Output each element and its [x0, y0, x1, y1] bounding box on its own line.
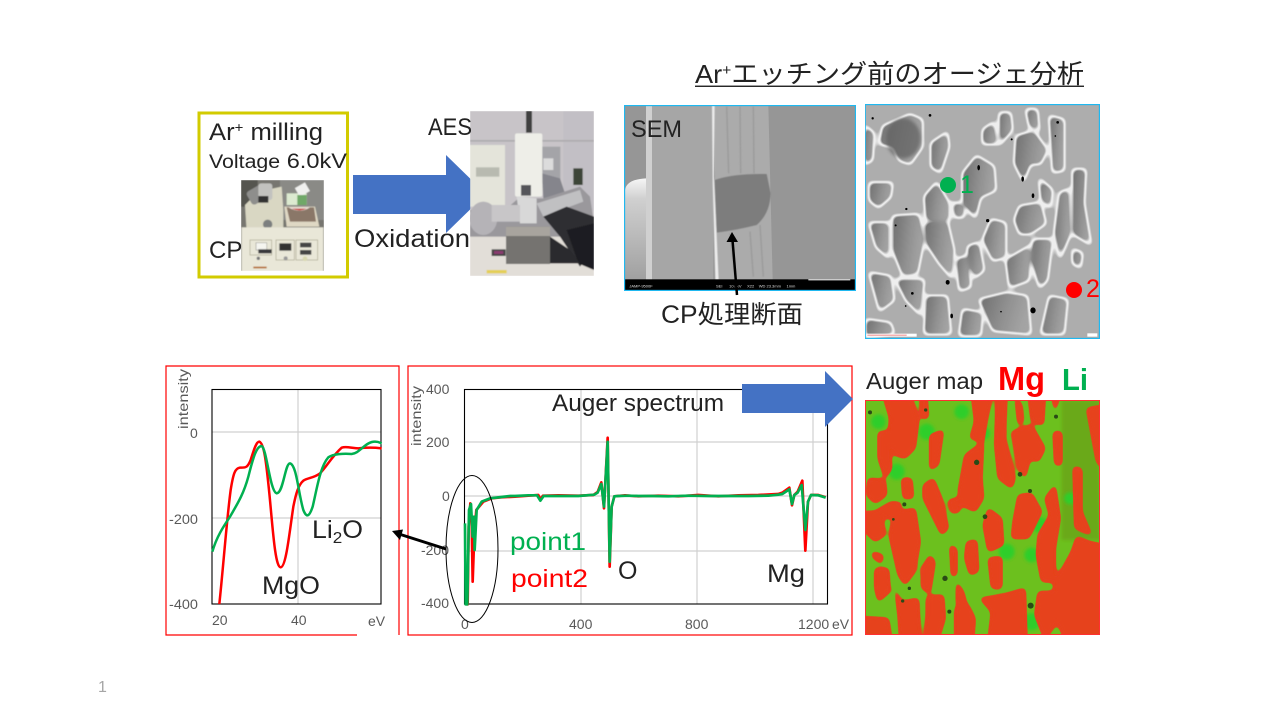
photo: Auger electron spectrometer [470, 111, 594, 276]
arrow: to CP cross-section [726, 232, 738, 295]
text: SEM settings: SEI 10.0kV X22 WD 23.3mm 1mm [716, 283, 796, 288]
y axis ticks: 0 [190, 425, 198, 441]
text: voltage: Voltage 6.0kV [209, 150, 347, 173]
arrow: oxidation transfer [353, 155, 486, 233]
chart: Auger element map [865, 400, 1100, 635]
text: CP cross-section label: CP処理断面 [661, 301, 803, 329]
grid lines and plot frame [464, 389, 828, 604]
x axis ticks: 20 [212, 612, 228, 628]
panel: CP Ar+ milling [199, 113, 348, 277]
annotation: Li2O: O [342, 516, 363, 544]
callout: low-energy ellipse [446, 476, 498, 622]
y axis ticks: -200 [169, 511, 198, 527]
photo: SEM micrograph with analysis points [865, 104, 1100, 339]
heading: Auger map: Auger map [866, 368, 983, 394]
text: Oxidation: Oxidation [354, 225, 470, 253]
photo: SEM overview [624, 105, 856, 291]
heading: Auger spectrum: Auger spectrum [552, 390, 724, 417]
y axis ticks: -400 [169, 596, 198, 612]
annotation: Li2O: 2 [333, 530, 342, 547]
arrow: spectrum to map [742, 371, 853, 427]
title: Ar+ etching Auger analysis: エッチング前のオージェ分析 [731, 59, 1084, 89]
axis label: intensity: intensity [175, 369, 191, 429]
x axis ticks: eV [832, 616, 850, 632]
annotation: Mg peak: Mg [767, 560, 805, 588]
annotation: O peak: O [618, 557, 637, 585]
y axis ticks: 400 [426, 381, 450, 397]
heading: Auger map [866, 360, 1088, 397]
text: CP label: CP [209, 237, 242, 264]
x axis ticks [212, 612, 386, 629]
text: point 1 number: 1 [960, 171, 974, 199]
y axis ticks: 200 [426, 434, 450, 450]
text: SEM instrument caption: JAMP-9500F [629, 283, 653, 288]
text: point 2 number: 2 [1086, 275, 1100, 303]
axis label: intensity: intensity [408, 386, 424, 446]
x axis ticks: 400 [569, 616, 593, 632]
y axis ticks: -200 [421, 542, 449, 558]
panel: zoomed low-energy spectrum [166, 366, 399, 635]
annotation: MgO: MgO [262, 572, 320, 600]
legend: Mg: Mg [998, 360, 1045, 397]
legend: point 1: point1 [510, 528, 586, 556]
y axis ticks: 0 [442, 488, 450, 504]
legend: Li: Li [1062, 362, 1088, 397]
text: SEM label: SEM [631, 116, 682, 143]
x axis ticks: eV [368, 613, 386, 629]
marker: point 1 [940, 177, 956, 193]
arrow: ellipse to zoomed spectrum [392, 530, 446, 549]
marker: point 2 [1066, 282, 1082, 298]
x axis ticks: 40 [291, 612, 307, 628]
grid lines and plot frame [212, 389, 381, 604]
title: Ar+ etching Auger analysis: Ar [695, 59, 721, 89]
legend: point 2: point2 [511, 565, 588, 593]
annotation: Li2O: Li [312, 516, 331, 544]
y axis ticks [169, 425, 198, 612]
text: AES label: AES [428, 114, 472, 141]
text: Ar+ milling: milling [243, 119, 323, 146]
title: Ar+ etching Auger analysis: + [722, 62, 732, 79]
x axis ticks [461, 616, 850, 632]
curves: survey spectra [465, 438, 826, 604]
y axis ticks [421, 381, 450, 611]
curves: point 1 and point 2 [212, 442, 382, 604]
panel: full Auger spectrum [408, 366, 852, 635]
x axis ticks: 800 [685, 616, 709, 632]
photo: cross-section polisher [241, 180, 324, 271]
x axis ticks: 0 [461, 616, 469, 632]
text: Ar+ milling: + [235, 119, 243, 135]
text: Ar+ milling: Ar [209, 119, 233, 146]
x axis ticks: 1200 [798, 616, 829, 632]
page number: 1 [98, 679, 107, 696]
y axis ticks: -400 [421, 595, 449, 611]
